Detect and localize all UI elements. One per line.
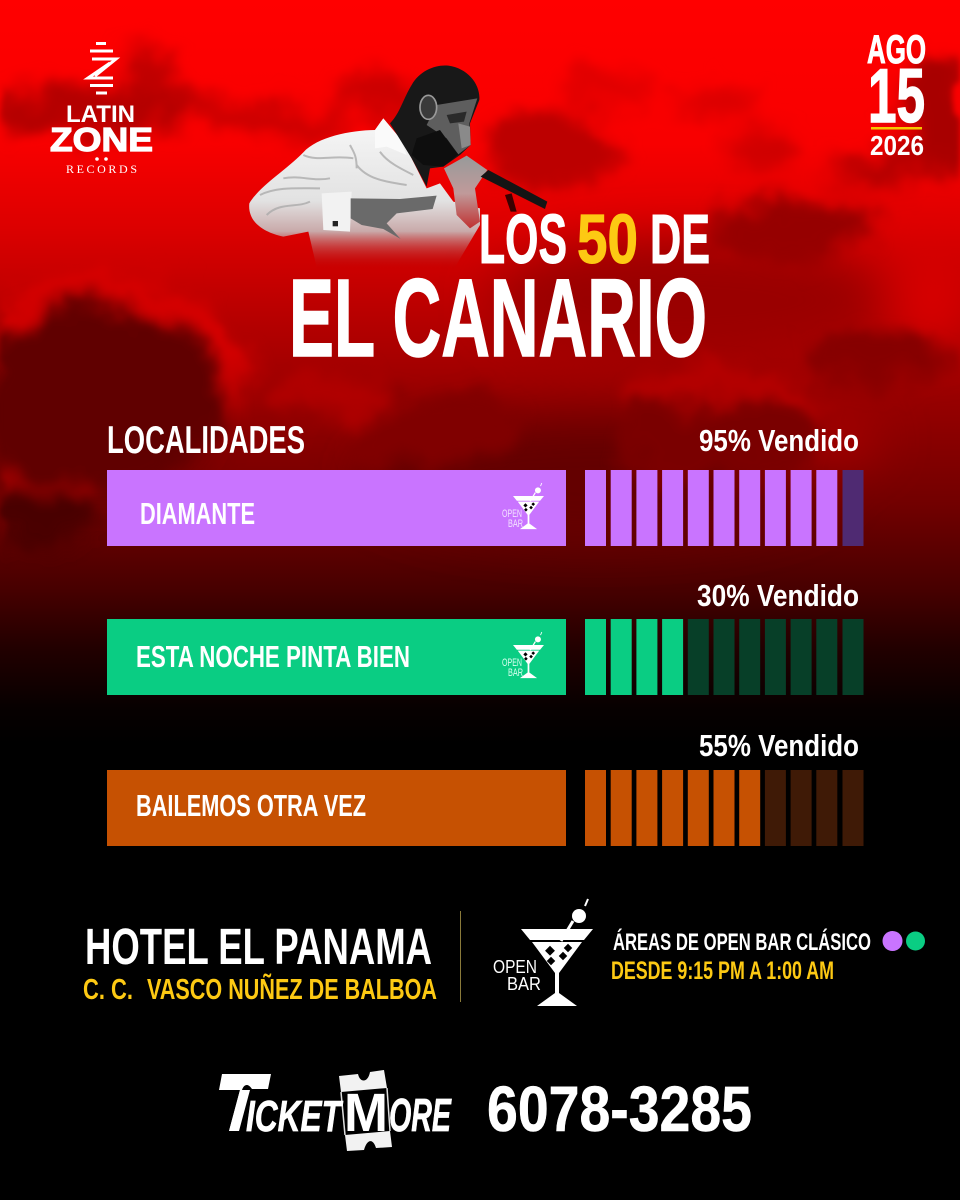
- legend dots: [882, 931, 902, 951]
- icon: open bar: BAR: [508, 667, 523, 679]
- bar label: ESTA NOCHE PINTA BIEN: [136, 639, 410, 674]
- bright rims: [0, 276, 245, 468]
- logo: Latin Zone Records: LATIN: [66, 101, 135, 128]
- outstretched hand: [351, 196, 437, 239]
- icon: open bar martini: OPEN: [493, 957, 537, 977]
- logo: TicketMore: ORE: [389, 1089, 452, 1141]
- icon: open bar: OPEN: [502, 657, 522, 669]
- bar label: DIAMANTE: [140, 496, 255, 531]
- row: Diamante: [107, 423, 864, 546]
- ear: [420, 95, 437, 119]
- collar: [375, 118, 407, 155]
- logo mark: [88, 44, 116, 93]
- logo: TicketMore: M: [344, 1083, 388, 1143]
- cuff: [322, 192, 352, 232]
- percent label: 55% Vendido: [699, 728, 859, 763]
- progress segments: [585, 470, 864, 546]
- open bar info: [611, 928, 925, 985]
- ticket top stub: [339, 1070, 387, 1092]
- progress segments: [585, 619, 864, 695]
- main bar: [107, 470, 566, 546]
- icon: open bar martini: [493, 899, 593, 1006]
- face: [427, 98, 477, 154]
- head and neck: [390, 65, 479, 187]
- date badge: 2026: [870, 130, 924, 161]
- venue block: [83, 918, 437, 1006]
- row: Bailemos Otra Vez: [107, 728, 864, 846]
- icon: open bar: OPEN: [502, 508, 522, 520]
- beard: [412, 130, 458, 167]
- icon: open bar: [502, 632, 544, 679]
- date badge: 15: [868, 54, 925, 139]
- venue block: VASCO NUÑEZ DE BALBOA: [147, 972, 437, 1006]
- icon: open bar martini: BAR: [507, 974, 541, 994]
- section heading: localidades: LOCALIDADES: [107, 419, 305, 462]
- title: [289, 200, 710, 380]
- phone number: 6078-3285: [487, 1073, 752, 1145]
- venue block: C. C.: [83, 974, 133, 1006]
- row: Esta Noche Pinta Bien: [107, 578, 864, 695]
- logo: TicketMore: ICKET: [246, 1092, 343, 1141]
- lower dark clouds: [0, 303, 225, 487]
- title: EL CANARIO: [289, 257, 707, 380]
- venue block: HOTEL EL PANAMA: [85, 918, 432, 975]
- title: 50: [577, 200, 638, 278]
- bar label: BAILEMOS OTRA VEZ: [136, 788, 366, 823]
- ticket bottom stub: [345, 1131, 392, 1151]
- progress segments: [585, 770, 864, 846]
- raised hand: [444, 156, 487, 228]
- logo: Latin Zone Records: ZONE: [50, 121, 153, 158]
- icon: open bar: BAR: [508, 518, 523, 530]
- percent label: 95% Vendido: [699, 423, 859, 458]
- percent label: 30% Vendido: [697, 578, 859, 613]
- main bar: [107, 619, 566, 695]
- date badge: AGO: [867, 28, 926, 72]
- logo: Latin Zone Records: RECORDS: [66, 162, 137, 176]
- main bar: [107, 770, 566, 846]
- upper dark clouds: [0, 86, 205, 130]
- logo: TicketMore: [219, 1070, 452, 1151]
- logo: Latin Zone Records: [50, 44, 153, 176]
- date badge: [867, 28, 926, 161]
- open bar info: DESDE 9:15 PM A 1:00 AM: [611, 957, 834, 985]
- title: DE: [650, 200, 710, 278]
- microphone: [481, 170, 547, 212]
- shirt folds: [260, 145, 413, 215]
- singer photo (drawn silhouette): [249, 65, 547, 270]
- shirt: [249, 118, 480, 270]
- icon: open bar: [502, 483, 544, 530]
- title: LOS: [479, 200, 567, 278]
